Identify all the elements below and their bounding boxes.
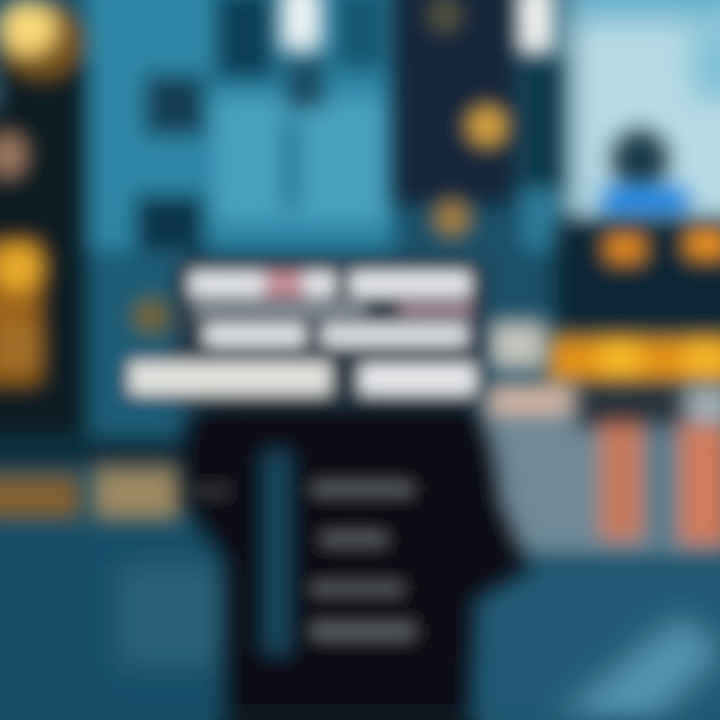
heading: blurred title lines	[130, 262, 485, 402]
ground: left street	[0, 530, 230, 720]
heading line 2	[195, 302, 470, 346]
text block: blurred list lines	[190, 483, 414, 639]
sky: upper right	[565, 0, 720, 240]
lamps: small amber lights	[132, 0, 508, 334]
left building: dark edge with lamps	[0, 60, 85, 440]
robot legs: salmon columns	[480, 322, 720, 555]
band: warm street glow	[0, 440, 190, 518]
accent: teal vertical strip	[262, 450, 292, 655]
ground: right street	[470, 565, 720, 720]
highlights: bright window slots	[283, 0, 552, 53]
building: teal glass facade	[85, 0, 395, 440]
panel: dark foreground figure	[180, 402, 530, 720]
tower: dark central building	[392, 0, 563, 250]
robot: dark figure on the right	[548, 128, 720, 384]
lamp: upper left glow	[0, 2, 84, 80]
heading line 1	[190, 272, 470, 296]
heading line 3	[130, 362, 475, 394]
